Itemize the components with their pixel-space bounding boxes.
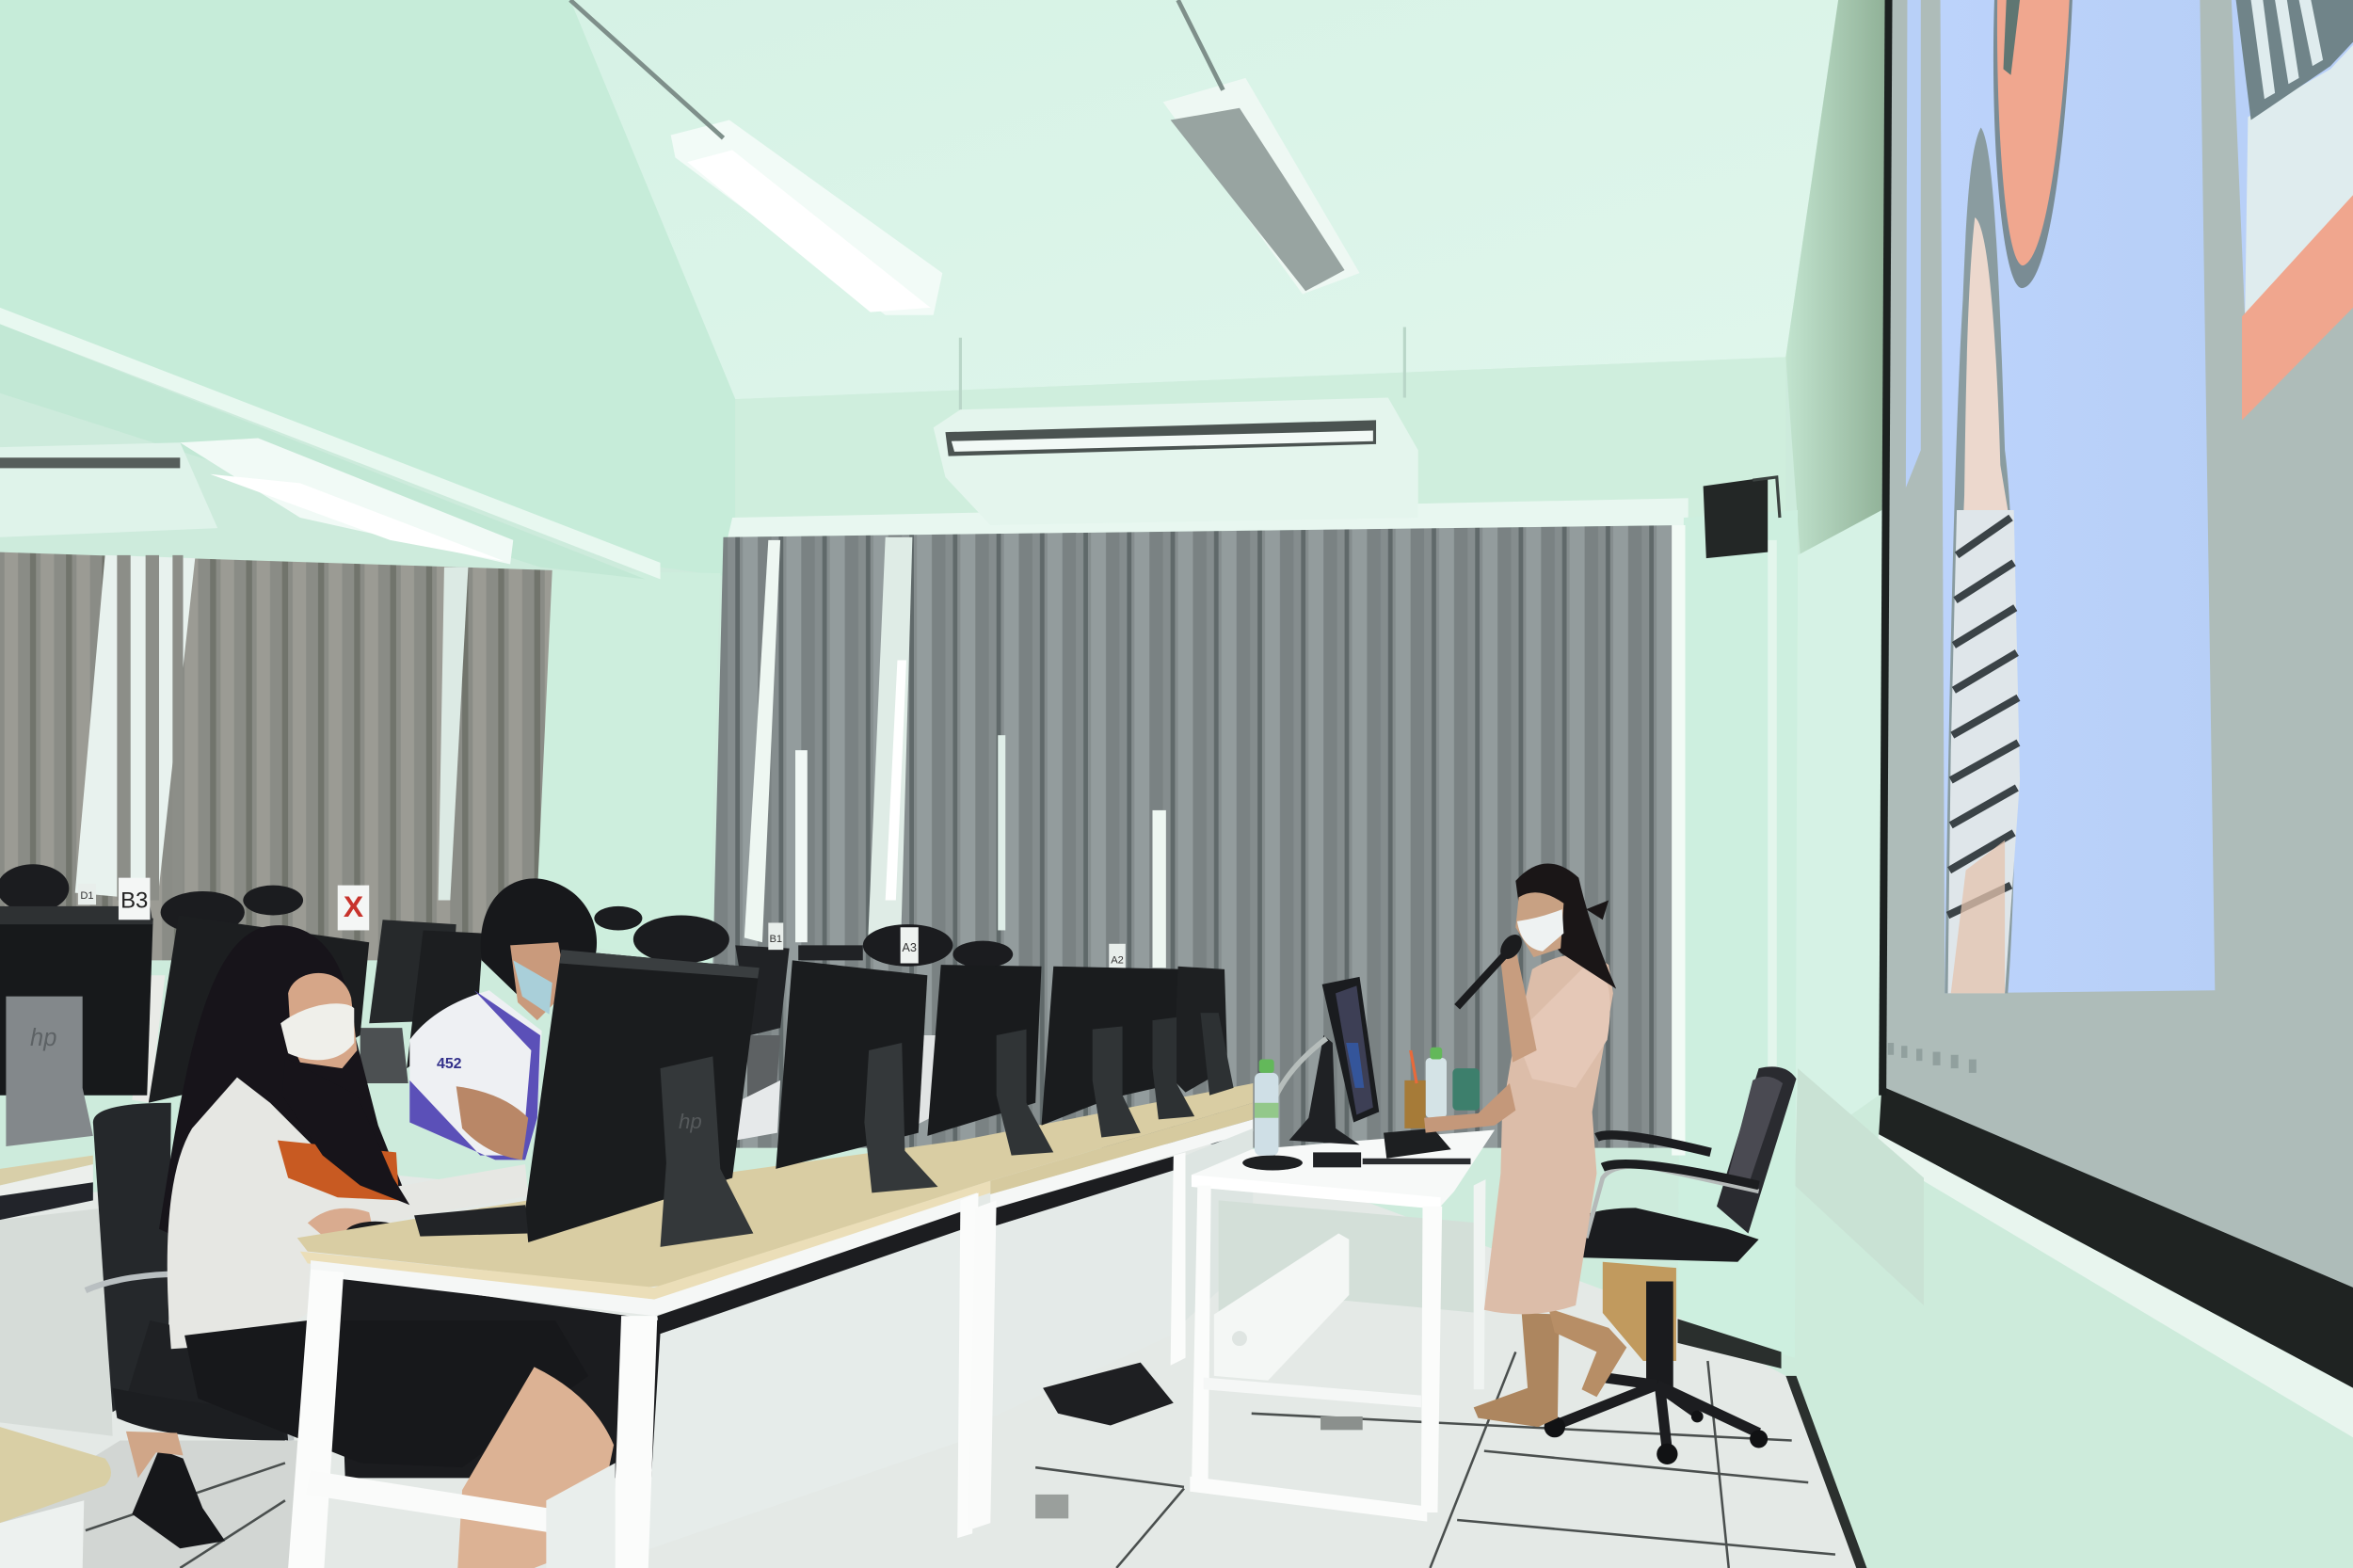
- background shirts and chairs: [132, 975, 937, 1141]
- skirting back wall: [1678, 1319, 1782, 1368]
- monitor two: [776, 960, 937, 1192]
- desktop surface: [297, 1141, 990, 1288]
- sock foot: [132, 1449, 225, 1548]
- teacher chair: [1545, 1066, 1796, 1464]
- hair: [1515, 863, 1616, 989]
- left wall: [0, 0, 735, 578]
- pillar: [1672, 510, 1798, 1358]
- main monitor: hp: [679, 1110, 702, 1133]
- screen white frame: [1876, 1134, 2353, 1437]
- face: [1515, 892, 1563, 957]
- presenter figure on slide: [1945, 128, 2020, 993]
- floor: [0, 1141, 1856, 1568]
- water bottle: [1255, 1060, 1278, 1156]
- seat label cards: A3: [902, 940, 917, 954]
- seat label cards: B1: [769, 934, 782, 945]
- hoodie: [168, 1078, 528, 1349]
- leg: [457, 1367, 614, 1568]
- hair bow: [1586, 901, 1609, 920]
- slide sidebar: [1906, 0, 1921, 488]
- face: [288, 973, 357, 1068]
- main monitor: [525, 950, 760, 1247]
- mirror reflection wall left: [0, 324, 646, 579]
- seat label cards: D1: [80, 890, 94, 902]
- under shadow: [657, 1211, 964, 1334]
- handbag: [1603, 1262, 1676, 1361]
- teacher desk: [1190, 1129, 1495, 1522]
- microphone on desk stand: [1242, 1038, 1326, 1171]
- monitor four: [1042, 967, 1189, 1137]
- male student: [409, 878, 597, 1160]
- orange print: [278, 1141, 399, 1200]
- air conditioner: [934, 328, 1418, 525]
- reflected air conditioner and light: [0, 439, 513, 564]
- bag on floor: [1043, 1363, 1174, 1426]
- right wall: [1785, 0, 2353, 1568]
- monitor five: [1152, 967, 1234, 1119]
- lower rail: [306, 1470, 614, 1543]
- main vertical blinds: [709, 525, 1684, 1148]
- left reflected blinds: [0, 552, 552, 960]
- blue slide: [1941, 0, 2215, 993]
- HP monitor stand left: [6, 997, 93, 1146]
- top band: [311, 1192, 977, 1316]
- male student: 452: [437, 1056, 462, 1072]
- mask: [1517, 909, 1563, 952]
- foreground desk corner: [0, 1427, 111, 1568]
- seat label cards: X: [344, 889, 363, 923]
- seat label cards: A2: [1111, 955, 1124, 967]
- back wall: [528, 357, 1785, 975]
- modesty panel: [647, 1229, 964, 1550]
- whiteboard edge: [1795, 1068, 1924, 1305]
- teacher monitor: [1289, 977, 1379, 1144]
- right louver light: [1163, 0, 1360, 294]
- seat label cards: [78, 878, 1126, 970]
- background students heads: [0, 864, 1013, 968]
- skirt: [184, 1320, 588, 1467]
- long hair: [159, 925, 409, 1245]
- student desk one: [288, 1141, 990, 1568]
- student chair back: [86, 1103, 291, 1440]
- slide right panel: [2232, 0, 2353, 420]
- speaker: [1704, 477, 1780, 558]
- taskbar icons: [1888, 1043, 1977, 1073]
- hair strand on front: [282, 1058, 409, 1205]
- microphone: [1457, 952, 1508, 1007]
- orange badge: [1993, 0, 2073, 288]
- HP monitor stand left: hp: [30, 1025, 56, 1051]
- female student: [126, 925, 614, 1568]
- desk one underside shadow: [338, 1275, 661, 1478]
- arm and hand: [1500, 949, 1537, 1063]
- teacher: [1424, 863, 1626, 1427]
- legs: [613, 1316, 657, 1568]
- dress: [1484, 954, 1613, 1314]
- soffit beam: [0, 308, 661, 579]
- mask: [280, 1003, 354, 1060]
- ceiling: [570, 0, 1838, 399]
- skirting right: [1785, 1376, 1866, 1568]
- keyboard: [414, 1205, 528, 1237]
- back row monitors: [0, 906, 863, 1103]
- student desk two: [945, 1083, 1253, 1530]
- left fluorescent light: [570, 0, 942, 315]
- screen black border: [1879, 1086, 2353, 1388]
- cable tray: [1214, 1233, 1349, 1381]
- projection screen: [1876, 0, 2353, 1437]
- seat label cards: B3: [120, 888, 148, 914]
- teacher keyboard and mouse: [1313, 1128, 1470, 1167]
- monitor three: [927, 965, 1053, 1156]
- drinks on teacher desk: [1404, 1048, 1480, 1128]
- hand and mouse: [308, 1208, 376, 1248]
- stand: [661, 1056, 753, 1247]
- legs: [1474, 1313, 1560, 1427]
- left rear desk: [0, 1156, 113, 1436]
